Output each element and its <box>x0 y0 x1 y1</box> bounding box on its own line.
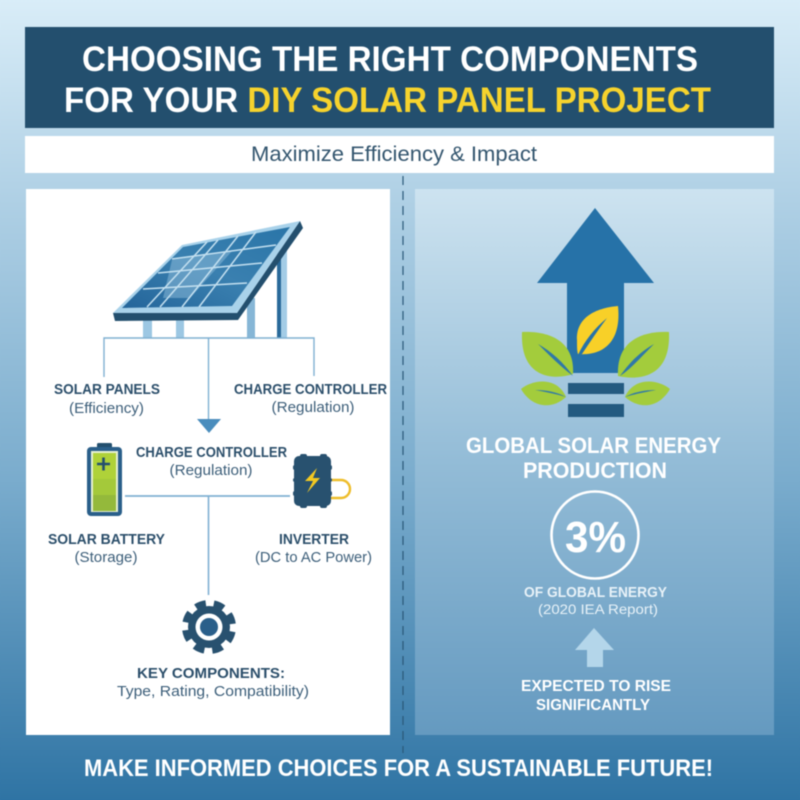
center dashed divider <box>402 176 404 753</box>
text: expected to rise: SIGNIFICANTLY <box>536 697 650 714</box>
label: key components: KEY COMPONENTS: <box>137 665 285 682</box>
arrow: down <box>197 419 221 433</box>
arrow: up small <box>575 628 614 667</box>
legs <box>143 318 152 338</box>
label: charge controller right: CHARGE CONTROLLER <box>234 381 387 398</box>
label: solar panels <box>54 381 160 417</box>
icon: inverter <box>293 454 350 508</box>
text: expected to rise <box>521 678 671 714</box>
icon: battery <box>87 443 122 516</box>
cell grid <box>143 232 276 307</box>
glass <box>122 227 290 308</box>
label: charge controller right <box>234 381 387 416</box>
stat circle: 3%: 3% <box>565 513 626 562</box>
label: solar battery <box>48 531 165 566</box>
subtitle bar: Maximize Efficiency & Impact <box>251 143 537 166</box>
stat caption <box>524 585 667 617</box>
icon: solar panel <box>113 221 303 338</box>
label: charge controller center <box>136 444 287 479</box>
yellow leaf <box>577 306 618 354</box>
connector lines <box>104 338 314 595</box>
heading: global solar energy production: GLOBAL SOLAR ENERGY <box>466 433 721 458</box>
title line 1: CHOOSING THE RIGHT COMPONENTS <box>82 40 698 79</box>
frame <box>113 221 300 313</box>
footer tagline: MAKE INFORMED CHOICES FOR A SUSTAINABLE FUTURE! <box>84 755 713 782</box>
label: charge controller right: (Regulation) <box>272 399 354 416</box>
label: inverter: INVERTER <box>279 531 349 548</box>
heading: global solar energy production <box>466 433 721 483</box>
label: key components: Type, Rating, Compatibility) <box>117 683 309 700</box>
panel: global solar energy <box>415 189 774 735</box>
label: key components <box>117 665 309 700</box>
stat circle: 3% <box>552 492 638 578</box>
label: solar battery: SOLAR BATTERY <box>48 531 165 548</box>
green leaves <box>522 332 573 377</box>
bars <box>568 383 624 394</box>
label: solar battery: (Storage) <box>74 549 138 566</box>
label: inverter <box>255 531 372 566</box>
subtitle bar <box>25 136 774 173</box>
stat caption: OF GLOBAL ENERGY <box>524 585 667 601</box>
heading: global solar energy production: PRODUCTION <box>523 458 667 483</box>
stat caption: (2020 IEA Report) <box>538 601 658 617</box>
icon: growth arrow with leaves <box>521 208 670 417</box>
label: solar panels: (Efficiency) <box>69 400 144 417</box>
panel: components <box>26 189 390 735</box>
icon: gear <box>181 599 237 655</box>
frame thickness <box>113 221 303 321</box>
title line 2: FOR YOUR DIY SOLAR PANEL PROJECT <box>64 81 711 120</box>
big arrow <box>537 208 654 373</box>
label: inverter: (DC to AC Power) <box>255 549 372 566</box>
label: charge controller center: (Regulation) <box>170 462 252 479</box>
title banner <box>25 27 774 128</box>
text: expected to rise: EXPECTED TO RISE <box>521 678 671 695</box>
label: charge controller center: CHARGE CONTROLLER <box>136 444 287 461</box>
label: solar panels: SOLAR PANELS <box>54 381 160 398</box>
glass reflection <box>163 250 233 298</box>
